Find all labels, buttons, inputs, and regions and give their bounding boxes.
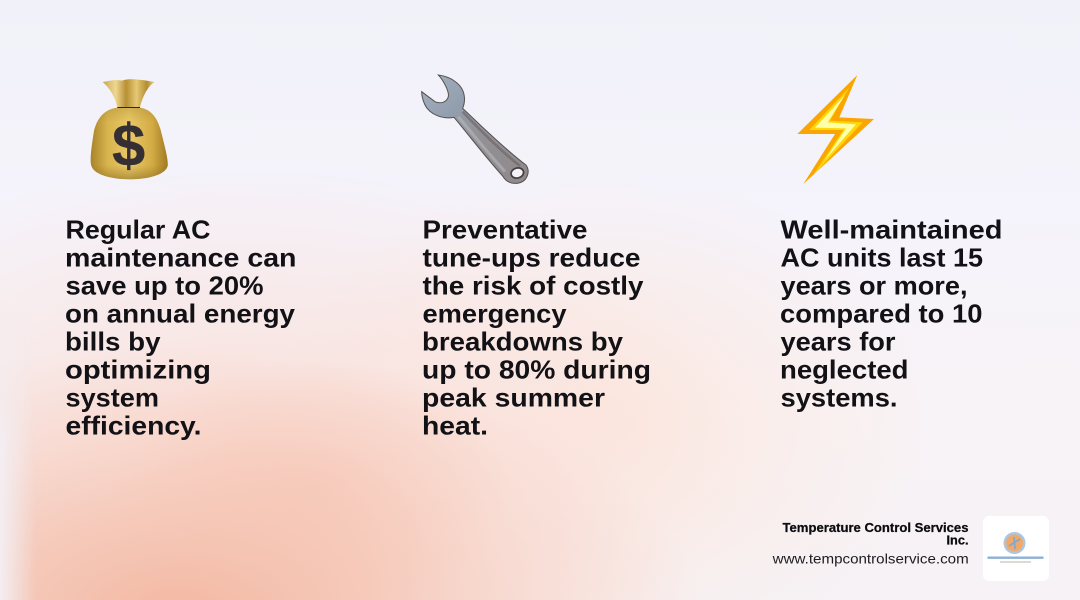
company name: Temperature Control Services [782, 521, 969, 535]
text block: energy savings: save up to 20% [66, 270, 264, 300]
text block: energy savings: on annual energy [65, 298, 296, 328]
text block: preventative tune-ups: up to 80% during [422, 354, 651, 384]
text block: preventative tune-ups: Preventative [422, 214, 588, 244]
text block: unit lifespan: Well-maintained [780, 214, 1002, 244]
text block: unit lifespan: systems. [780, 382, 898, 412]
icon: lightning bolt [797, 75, 874, 184]
icon: money bag: $ [112, 112, 145, 179]
company name [782, 521, 969, 547]
text block: preventative tune-ups: the risk of costly [422, 270, 644, 300]
text block: preventative tune-ups: peak summer [422, 382, 605, 412]
text block: unit lifespan: years for [780, 326, 896, 356]
text block: energy savings: system [66, 382, 159, 412]
text block: unit lifespan: compared to 10 [780, 298, 982, 328]
text block: energy savings: bills by [65, 326, 161, 356]
text block: energy savings: optimizing [65, 354, 211, 384]
icon: wrench [421, 74, 529, 184]
text block: preventative tune-ups [422, 214, 651, 440]
text block: unit lifespan: AC units last 15 [780, 242, 983, 272]
text block: unit lifespan [780, 214, 1002, 412]
logo card [982, 516, 1048, 581]
text block: energy savings: maintenance can [65, 242, 296, 272]
text block: energy savings [65, 214, 296, 440]
icon: company logo [988, 532, 1044, 563]
background left edge fade [0, 384, 31, 600]
text block: energy savings: Regular AC [66, 214, 211, 244]
text block: preventative tune-ups: tune-ups reduce [422, 242, 640, 272]
company name: Inc. [946, 533, 968, 547]
text block: energy savings: efficiency. [66, 410, 202, 440]
text block: preventative tune-ups: breakdowns by [422, 326, 624, 356]
text block: unit lifespan: neglected [780, 354, 908, 384]
website url: www.tempcontrolservice.com [772, 550, 969, 566]
text block: preventative tune-ups: heat. [422, 410, 488, 440]
text block: unit lifespan: years or more, [780, 270, 968, 300]
text block: preventative tune-ups: emergency [422, 298, 567, 328]
icon: money bag [90, 79, 168, 180]
